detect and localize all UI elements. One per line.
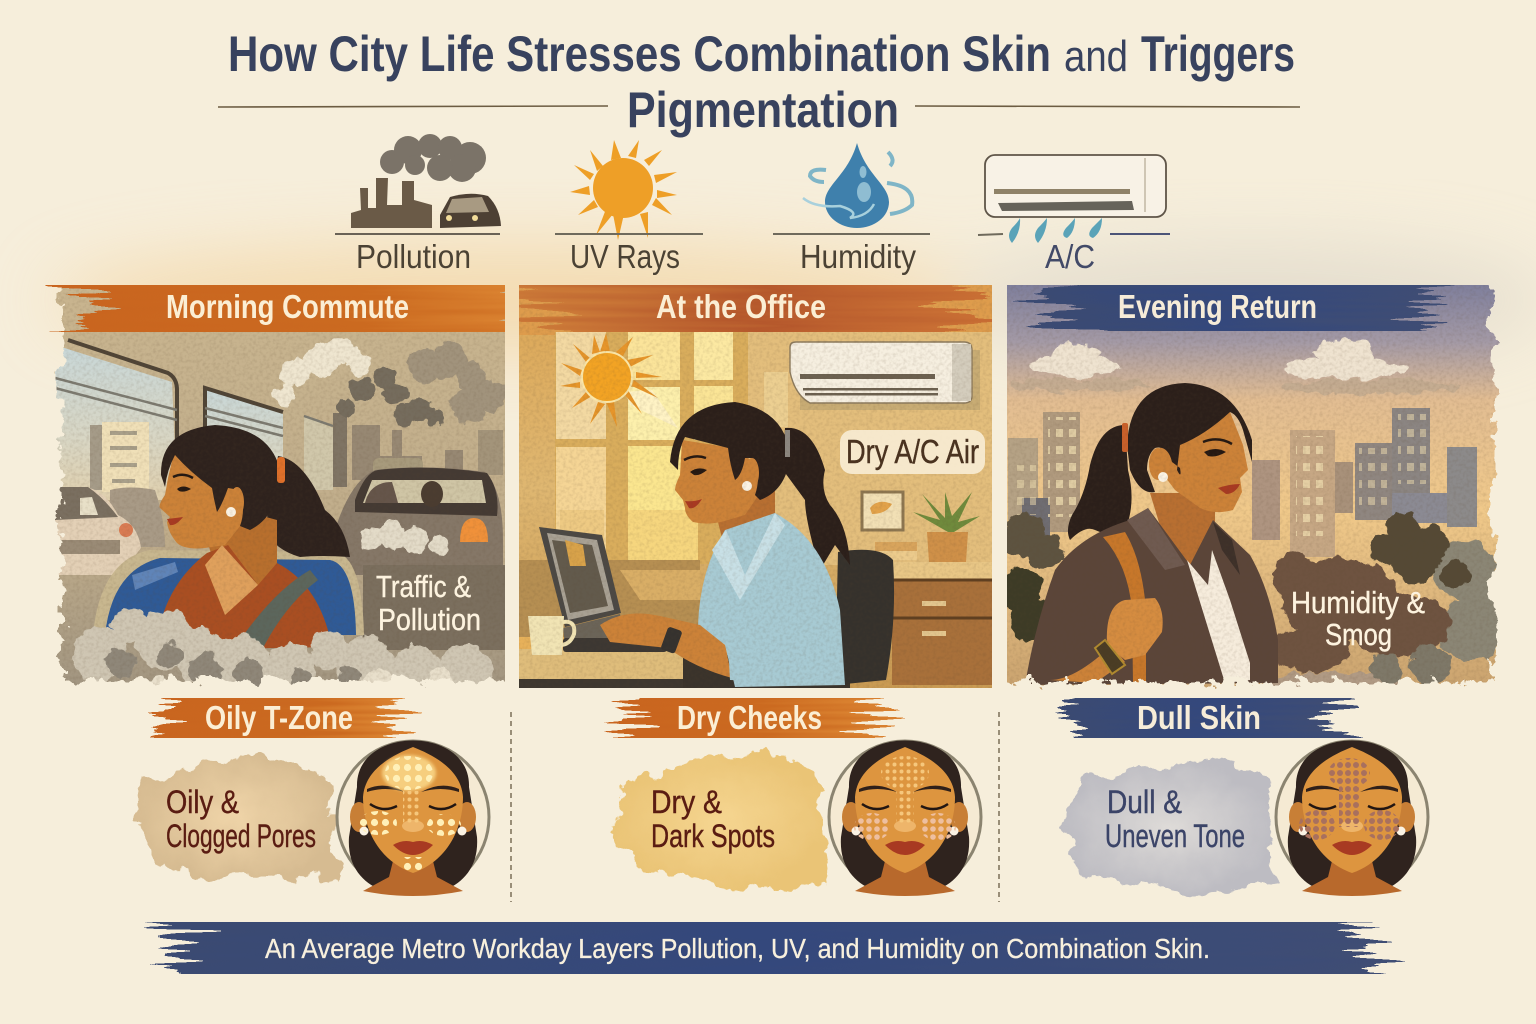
caption: traffic and pollution: Pollution — [378, 602, 481, 637]
title: Triggers — [1141, 26, 1295, 82]
label: A/C: A/C — [1045, 238, 1095, 275]
trees and smog — [998, 512, 1511, 696]
panel: at the office — [519, 285, 992, 690]
portrait: oily t-zone — [337, 740, 489, 896]
heading: morning commute: Morning Commute — [166, 288, 409, 325]
woman: office worker — [600, 402, 850, 687]
text: dry and dark spots — [651, 784, 775, 854]
label: humidity: Humidity — [800, 238, 916, 275]
scene: city at dusk — [998, 285, 1515, 696]
banner: evening return — [1050, 285, 1425, 331]
panel: morning commute — [45, 285, 505, 688]
title: Pigmentation — [627, 82, 899, 138]
warm haze band — [50, 245, 1536, 355]
text: dull and uneven tone: Uneven Tone — [1105, 818, 1245, 854]
caption: humidity and smog: Smog — [1325, 617, 1392, 652]
label: UV rays: UV Rays — [570, 238, 680, 275]
callout: dry A/C air: Dry A/C Air — [846, 433, 979, 470]
title — [218, 26, 1300, 138]
text: dull and uneven tone: Dull & — [1107, 784, 1182, 820]
icon: sun — [555, 140, 703, 240]
banner: dry cheeks — [623, 698, 868, 738]
skin effect: dry cheeks — [612, 698, 981, 896]
caption: traffic and pollution: Traffic & — [376, 569, 471, 604]
window — [555, 332, 992, 565]
footer banner — [172, 922, 1368, 974]
heading: oily t-zone: Oily T-Zone — [205, 699, 353, 736]
lower wall — [519, 560, 700, 637]
blob: dry — [612, 750, 830, 888]
banner: at the office — [540, 285, 970, 332]
desk: work surface — [519, 637, 850, 690]
panel: evening return — [998, 285, 1515, 696]
heading: at the office: At the Office — [656, 288, 826, 325]
skyline — [1008, 408, 1477, 557]
bus seat — [93, 550, 364, 635]
title: and — [1064, 32, 1128, 81]
blob: oily — [132, 752, 340, 882]
portrait: dull skin — [1276, 740, 1428, 896]
banner: dull skin — [1076, 698, 1331, 738]
text: dry and dark spots: Dry & — [651, 784, 722, 820]
text: dry and dark spots: Dark Spots — [651, 818, 775, 854]
skin effect: oily t-zone — [132, 698, 489, 896]
caption: traffic and pollution — [376, 569, 481, 637]
heading: dull skin: Dull Skin — [1137, 699, 1261, 736]
caption: humidity and smog: Humidity & — [1291, 585, 1425, 620]
chair — [835, 550, 894, 685]
banner: oily t-zone — [166, 698, 394, 738]
sun in window — [560, 333, 662, 427]
title: How City Life Stresses Combination Skin — [228, 26, 1051, 82]
caption: humidity and smog — [1291, 585, 1425, 652]
scene: office — [519, 285, 992, 690]
heading: dry cheeks: Dry Cheeks — [677, 699, 822, 736]
laptop — [539, 527, 667, 652]
traffic: left cars — [110, 488, 165, 547]
woman: commuter — [157, 425, 350, 650]
skin effect: dull skin — [1062, 698, 1428, 896]
mug — [528, 616, 574, 655]
smoke foreground — [71, 608, 494, 688]
picture and plant — [862, 492, 980, 562]
text: oily and clogged pores — [166, 784, 316, 854]
traffic: right car — [332, 467, 503, 575]
text: oily and clogged pores: Clogged Pores — [166, 818, 316, 854]
heading: evening return: Evening Return — [1118, 288, 1317, 325]
text: dull and uneven tone — [1105, 784, 1245, 854]
label: pollution: Pollution — [356, 238, 471, 275]
icon: water drop — [773, 143, 930, 234]
text: oily and clogged pores: Oily & — [166, 784, 239, 820]
footer text: An Average Metro Workday Layers Pollution, UV, and Humidity on Combination Skin. — [265, 933, 1210, 964]
banner: morning commute — [78, 285, 548, 332]
icon: pollution — [335, 134, 501, 234]
woman: returning commuter — [1025, 383, 1278, 685]
icon: air conditioner — [978, 155, 1170, 243]
portrait: dry cheeks — [829, 740, 981, 896]
desk: drawers — [892, 562, 992, 685]
blob: dull — [1062, 760, 1275, 895]
scene: bus with traffic and smoke — [54, 288, 505, 688]
air conditioner — [790, 342, 980, 410]
